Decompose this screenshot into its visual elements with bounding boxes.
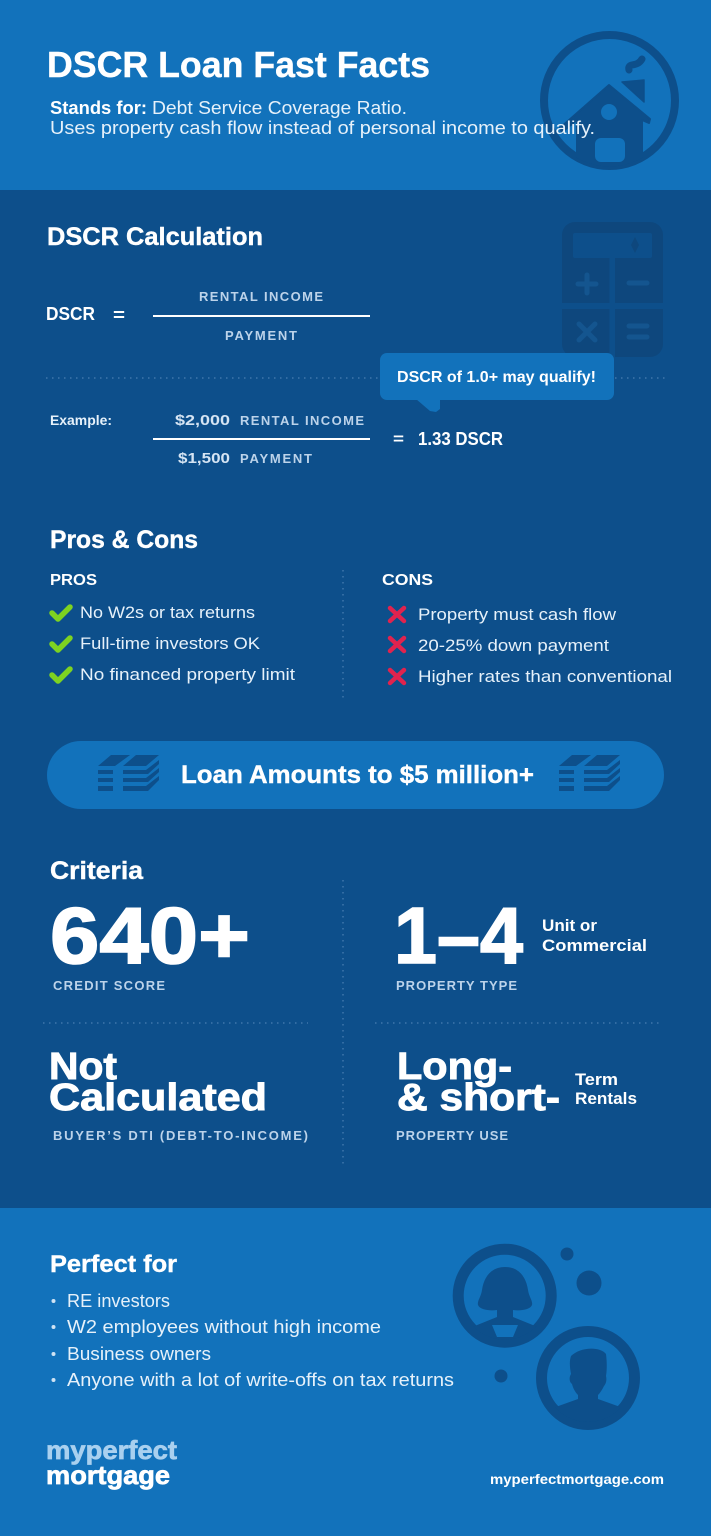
formula: = [113,305,125,325]
text block: definition: Debt Service Coverage Ratio. [152,98,407,118]
heading: Perfect for: Perfect for [50,1251,177,1278]
example calculation: $2,000 [175,412,230,429]
callout: DSCR of 1.0+ may qualify! [397,369,596,386]
panel: perfect for [0,1208,711,1536]
example calculation: 1.33 DSCR [418,429,503,449]
banner text: Loan Amounts to $5 million+ [181,761,534,789]
icon: house in circle [544,35,675,170]
list: audience: Anyone with a lot of write-offs on tax returns [67,1370,454,1390]
list: pros: No financed property limit [80,665,295,684]
banner: loan amounts [47,741,664,809]
example calculation: $1,500 [178,450,230,467]
panel: DSCR calculation [46,222,667,467]
stat: property use: & short- [397,1077,560,1119]
stat: property type: 1–4 [394,891,523,980]
stat: property type: Commercial [542,936,647,955]
icon: calculator [562,222,663,357]
formula [46,289,370,343]
formula: DSCR [46,304,95,324]
example calculation: PAYMENT [240,451,312,466]
stat: property type: PROPERTY TYPE [396,978,517,993]
stat: DTI: Calculated [49,1077,267,1119]
stat: DTI: BUYER’S DTI (DEBT-TO-INCOME) [53,1128,308,1143]
icon: people [458,1248,640,1430]
stat: DTI [49,1046,308,1143]
text block: definition: Stands for: [50,98,147,118]
title: DSCR Loan Fast Facts [47,44,430,85]
heading: Criteria: Criteria [50,857,144,885]
panel: pros and cons [50,526,672,700]
example calculation: RENTAL INCOME [240,413,364,428]
list: pros [50,572,295,684]
logo: mortgage [46,1460,170,1490]
stat: DTI: Not [49,1046,117,1088]
stat: property use: Rentals [575,1089,637,1108]
list: cons: Higher rates than conventional [418,667,672,686]
formula: RENTAL INCOME [199,289,323,304]
text block: definition [50,98,595,138]
list: cons [382,572,672,686]
stat: property use [396,1046,637,1143]
list: cons: 20-25% down payment [418,636,609,655]
stat: credit score: CREDIT SCORE [53,978,165,993]
stat: property use: PROPERTY USE [396,1128,508,1143]
list: pros: Full-time investors OK [80,634,261,653]
list: cons: Property must cash flow [418,605,617,624]
text block: definition: Uses property cash flow instead of personal income to qualify. [50,118,595,138]
callout [380,353,614,412]
stat: property use: Long- [397,1046,512,1088]
logo: myperfect [46,1435,177,1465]
example calculation: Example: [50,412,112,428]
stat: property type [394,891,647,993]
list: cons: CONS [382,572,433,589]
icon: money stacks right [559,755,620,791]
logo [46,1435,177,1490]
example calculation [50,412,503,467]
list: pros: PROS [50,572,97,589]
list: audience [52,1291,454,1390]
formula: PAYMENT [225,328,297,343]
list: audience: Business owners [67,1344,211,1364]
heading: DSCR Calculation: DSCR Calculation [47,223,263,251]
stat: credit score: 640+ [50,891,250,980]
list: pros: No W2s or tax returns [80,603,255,622]
list: audience: RE investors [67,1291,170,1311]
stat: property use: Term [575,1070,618,1089]
example calculation: = [393,431,404,448]
panel: header [0,0,711,190]
website: myperfectmortgage.com [490,1471,664,1487]
list: audience: W2 employees without high income [67,1317,381,1337]
stat: property type: Unit or [542,916,597,935]
panel: criteria [43,857,660,1165]
icon: money stacks left [98,755,159,791]
heading: Pros & Cons: Pros & Cons [50,526,198,554]
